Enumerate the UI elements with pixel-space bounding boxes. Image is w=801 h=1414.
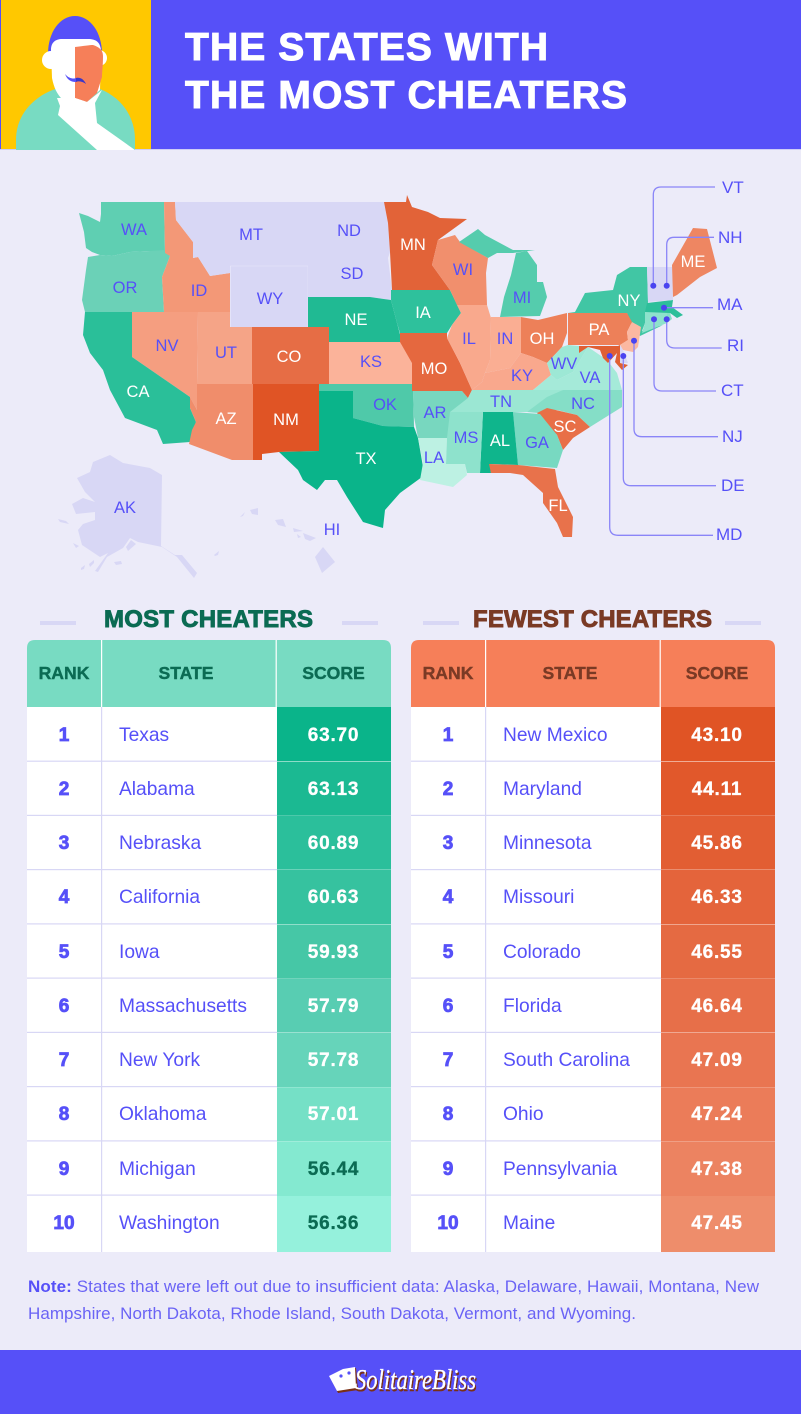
table: most cheaters: 1: [59, 725, 70, 746]
table: fewest cheaters: South Carolina: [503, 1050, 630, 1071]
table: most cheaters: 5: [59, 942, 70, 963]
state labels: SC: [554, 418, 577, 436]
table: most cheaters: California: [119, 887, 200, 908]
table: most cheaters: 7: [59, 1050, 69, 1071]
note: Note: States that were left out due to insufficient data: Alaska, Delaware, Hawaii, Montana, New: [28, 1277, 760, 1296]
table: fewest cheaters: 46.64: [691, 996, 743, 1017]
table: fewest cheaters: Colorado: [503, 942, 581, 963]
state labels: UT: [215, 344, 237, 362]
state labels: PA: [589, 321, 609, 339]
table: fewest cheaters: 10: [437, 1213, 459, 1234]
logo: SolitaireBliss: [356, 1366, 477, 1398]
state labels: MI: [513, 289, 531, 307]
table: most cheaters: SCORE: [302, 663, 365, 683]
state labels: WY: [257, 290, 283, 308]
title: [185, 26, 627, 117]
table: most cheaters: Massachusetts: [119, 996, 247, 1017]
table: fewest cheaters: Maine: [503, 1213, 555, 1234]
state labels: AZ: [215, 410, 237, 428]
table: most cheaters: 6: [59, 996, 69, 1017]
table: fewest cheaters: 46.55: [691, 942, 743, 963]
state labels: AL: [490, 432, 510, 450]
state labels: OR: [113, 279, 137, 297]
state labels: TX: [355, 450, 377, 468]
state labels: KS: [360, 353, 382, 371]
footer band: [0, 1350, 801, 1414]
table: most cheaters: 9: [59, 1159, 69, 1180]
title: THE MOST CHEATERS: [185, 74, 627, 117]
header band: [0, 0, 801, 150]
table: most cheaters: Texas: [119, 725, 169, 746]
state labels: ID: [191, 282, 207, 300]
state labels: CO: [277, 348, 302, 366]
table: fewest cheaters: SCORE: [686, 663, 749, 683]
callouts for small northeastern states: RI: [727, 336, 744, 355]
state labels: HI: [324, 521, 340, 539]
table: fewest cheaters: 7: [443, 1050, 453, 1071]
state labels: FL: [548, 497, 568, 515]
central states: [418, 438, 467, 487]
state labels: NY: [618, 292, 640, 310]
state labels: LA: [424, 449, 444, 467]
state labels: WI: [453, 261, 473, 279]
state labels: ND: [337, 222, 361, 240]
table: fewest cheaters: 1: [443, 725, 454, 746]
state labels: NV: [156, 337, 178, 355]
map of the United States: [58, 178, 745, 578]
table: fewest cheaters: 47.24: [691, 1104, 743, 1125]
table: fewest cheaters: 2: [443, 779, 453, 800]
eastern states: [547, 345, 588, 380]
callouts for small northeastern states: CT: [721, 381, 744, 400]
table: fewest cheaters: 47.09: [691, 1050, 743, 1071]
state labels: NM: [273, 411, 299, 429]
callouts for small northeastern states: DE: [721, 476, 745, 495]
state labels: WV: [551, 355, 577, 373]
table: most cheaters: RANK: [39, 663, 90, 683]
icon: masked man: [1, 0, 151, 150]
heading: fewest cheaters: FEWEST CHEATERS: [473, 606, 712, 633]
table: fewest cheaters: Minnesota: [503, 833, 592, 854]
state labels: MN: [400, 236, 426, 254]
note: [28, 1277, 760, 1323]
table: most cheaters: [27, 640, 391, 1252]
callouts for small northeastern states: [607, 178, 745, 544]
state labels: OH: [530, 330, 554, 348]
table: most cheaters: STATE: [158, 663, 214, 683]
state labels: NE: [345, 311, 367, 329]
table: most cheaters: Washington: [119, 1213, 220, 1234]
table: most cheaters: 57.78: [308, 1050, 359, 1071]
state labels: OK: [373, 396, 397, 414]
table: fewest cheaters: Florida: [503, 996, 562, 1017]
table: most cheaters: Nebraska: [119, 833, 201, 854]
table: fewest cheaters: 6: [443, 996, 453, 1017]
note: Hampshire, North Dakota, Rhode Island, South Dakota, Vermont, and Wyoming.: [28, 1304, 636, 1323]
table: fewest cheaters: 45.86: [691, 833, 743, 854]
table: most cheaters: 60.63: [308, 887, 359, 908]
state labels: CA: [127, 383, 149, 401]
table: most cheaters: Oklahoma: [119, 1104, 207, 1125]
table: most cheaters: 8: [59, 1104, 69, 1125]
state labels: NC: [571, 395, 595, 413]
table: most cheaters: 59.93: [308, 942, 359, 963]
table: fewest cheaters: 3: [443, 833, 453, 854]
table: fewest cheaters: 46.33: [691, 887, 743, 908]
table: most cheaters: 4: [59, 887, 70, 908]
table: most cheaters: Michigan: [119, 1159, 196, 1180]
title: THE STATES WITH: [185, 26, 548, 69]
table: most cheaters: 60.89: [308, 833, 359, 854]
state labels: AR: [424, 404, 447, 422]
table: fewest cheaters: 4: [443, 887, 454, 908]
table: fewest cheaters: STATE: [542, 663, 598, 683]
state labels: VA: [580, 369, 600, 387]
western states: [79, 202, 165, 256]
table: most cheaters: 56.36: [308, 1213, 359, 1234]
table: most cheaters: New York: [119, 1050, 200, 1071]
table: fewest cheaters: Pennsylvania: [503, 1159, 617, 1180]
logo: SolitaireBliss: [355, 1364, 476, 1396]
state labels: IN: [497, 330, 513, 348]
table: most cheaters: 63.13: [308, 779, 359, 800]
logo: [329, 1364, 477, 1398]
table: fewest cheaters: 44.11: [692, 779, 742, 800]
callouts for small northeastern states: MA: [717, 295, 743, 314]
table: most cheaters: Iowa: [119, 942, 160, 963]
table: most cheaters: 63.70: [308, 725, 359, 746]
table: fewest cheaters: Maryland: [503, 779, 582, 800]
state labels: KY: [511, 367, 533, 385]
state labels: [113, 221, 705, 539]
table: most cheaters: 3: [59, 833, 69, 854]
callouts for small northeastern states: VT: [722, 178, 744, 197]
table: fewest cheaters: Ohio: [503, 1104, 544, 1125]
table: most cheaters: 10: [53, 1213, 75, 1234]
table: most cheaters: Alabama: [119, 779, 195, 800]
state labels: GA: [525, 434, 549, 452]
Alaska and Hawaii: [58, 455, 335, 578]
state labels: TN: [490, 393, 512, 411]
heading: most cheaters: MOST CHEATERS: [104, 606, 313, 633]
table: fewest cheaters: New Mexico: [503, 725, 608, 746]
callouts for small northeastern states: NH: [718, 228, 743, 247]
table: fewest cheaters: [411, 640, 775, 1252]
state labels: ME: [681, 253, 705, 271]
table: fewest cheaters: Missouri: [503, 887, 574, 908]
table: most cheaters: 2: [59, 779, 69, 800]
table: most cheaters: 56.44: [308, 1159, 359, 1180]
state labels: MS: [454, 429, 478, 447]
callouts for small northeastern states: MD: [716, 525, 742, 544]
table: fewest cheaters: 47.45: [691, 1213, 743, 1234]
state labels: AK: [114, 499, 136, 517]
state labels: WA: [121, 221, 147, 239]
table: most cheaters: 57.79: [308, 996, 359, 1017]
state labels: SD: [341, 265, 364, 283]
callouts for small northeastern states: NJ: [722, 427, 743, 446]
table: most cheaters: 57.01: [308, 1104, 359, 1125]
state labels: MT: [239, 226, 263, 244]
table: fewest cheaters: 5: [443, 942, 454, 963]
table: fewest cheaters: 47.38: [691, 1159, 743, 1180]
state labels: MO: [421, 360, 447, 378]
table: fewest cheaters: 9: [443, 1159, 453, 1180]
table: fewest cheaters: RANK: [423, 663, 474, 683]
heading: most cheaters: [40, 606, 378, 633]
table: fewest cheaters: 43.10: [691, 725, 743, 746]
table: fewest cheaters: 8: [443, 1104, 453, 1125]
state labels: IL: [462, 330, 476, 348]
state labels: IA: [415, 304, 431, 322]
